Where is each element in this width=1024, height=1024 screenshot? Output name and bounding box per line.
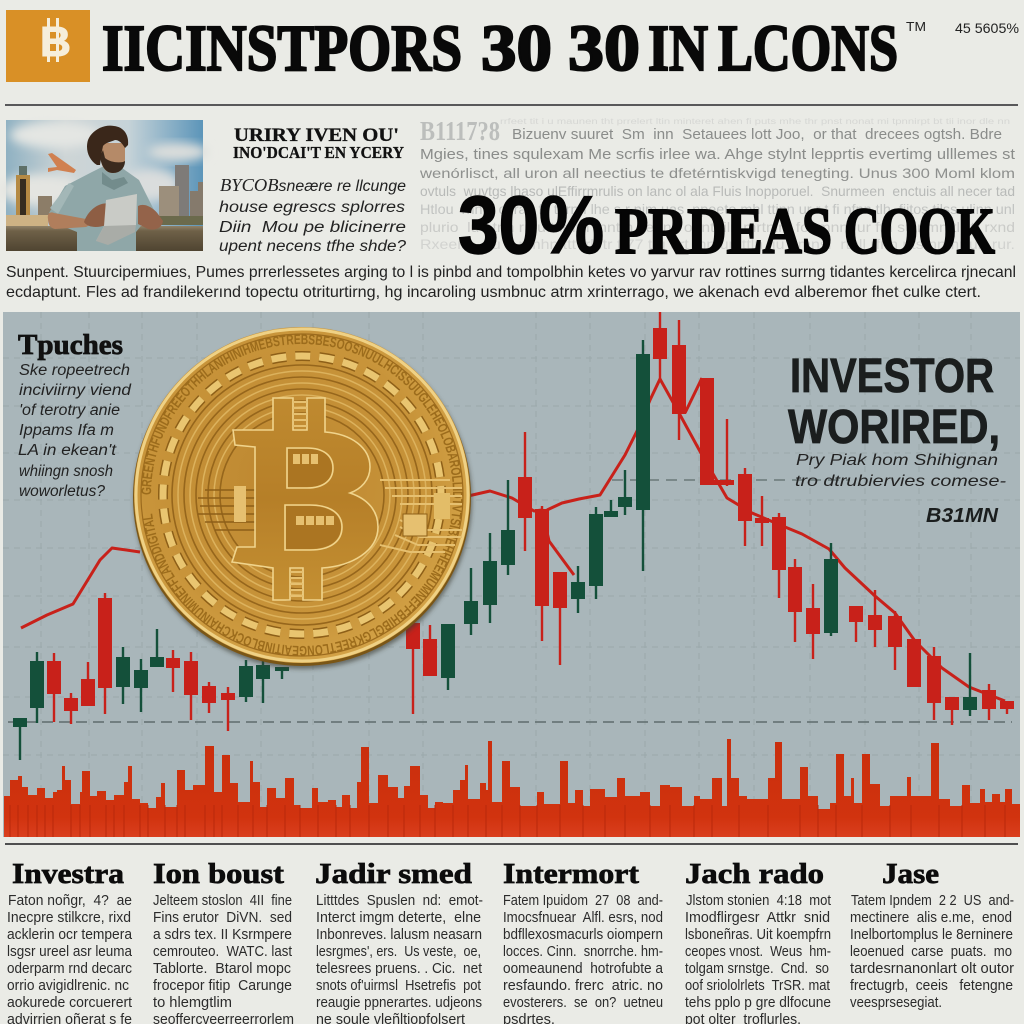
- callout text: Ippams Ifa m: [19, 422, 114, 439]
- column: Jadir smed: lesrgmes', ers. Us veste, oe,: [316, 944, 481, 960]
- column: Jadir smed: reaugie ppnerartes. udjeons: [316, 995, 482, 1011]
- column: Ion boust: frocepor fitip Carunge: [153, 978, 292, 994]
- column: Ion boust: Fins erutor DiVN. sed: [153, 910, 292, 926]
- main headline: 30%: [458, 180, 604, 271]
- callout text: Ske ropeetrech: [19, 362, 130, 379]
- masthead title: IN: [648, 12, 708, 85]
- column: Jach rado: ceopes vnost. Weus hm-: [685, 944, 831, 960]
- column: Intermort: evosterers. se on? uetneu: [503, 995, 663, 1011]
- column: Jase: mectinere alis e.me, enod: [850, 910, 1012, 926]
- callout text: inciviirny viend: [19, 382, 133, 399]
- faded article text: Mgies, tines squlexam Me scrfis irlee wa. Ahge stylnt lepprtis evertimg ulllemes st: [420, 146, 1016, 163]
- column: Investra: Faton noñgr, 4? ae: [8, 893, 132, 909]
- italic intro text: house egrescs splorres: [219, 199, 405, 216]
- faded article text: plurio lu ntnn rrsu tfimrn fnnt n tle tnl onnt tiln mrtnin fonmnnt ur ftn sulnmn tlilltr rxnd: [420, 219, 1015, 235]
- column: Jase: [850, 859, 1014, 1011]
- column: Intermort: oomeaunend hotrofubte a: [503, 961, 664, 977]
- column: Ion boust: cemrouteo. WATC. last: [153, 944, 292, 960]
- column: Intermort: Imocsfnuear Alfl. esrs, nod: [503, 910, 663, 926]
- callout figure: B31MN: [926, 505, 999, 527]
- column: Investra: Investra: [12, 859, 124, 890]
- volume bars: [4, 739, 1020, 837]
- column: Jach rado: tolgam srnstge. Cnd. so: [685, 961, 829, 977]
- column: Ion boust: a sdrs tex. II Ksrmpere: [153, 927, 292, 943]
- column: Ion boust: Jelteem stoslon 4II fine: [153, 893, 292, 909]
- column: Investra: aokurede corcuerert: [7, 995, 132, 1011]
- column: Investra: Inecpre stilkcre, rixd: [7, 910, 131, 926]
- column: Jadir smed: Litttdes Spuslen nd: emot-: [316, 893, 483, 909]
- column: Jach rado: oof sriololrlets TrSR. mat: [685, 978, 830, 994]
- column: Jase: veesprsesegiat.: [850, 995, 942, 1011]
- masthead title: IICINSTPORS: [102, 12, 462, 85]
- column: Jase: Jase: [882, 859, 939, 890]
- panel: price chart: [3, 312, 1020, 837]
- column: Ion boust: to hlemgtlim: [153, 995, 232, 1011]
- column: Ion boust: Ion boust: [153, 859, 285, 890]
- masthead title: LCONS: [718, 12, 898, 85]
- kicker headline: URIRY IVEN OU': [234, 125, 399, 146]
- column: Investra: orrio avigidlrenic. nc: [7, 978, 129, 994]
- italic intro text: BYCOBsneære re llcunge: [220, 175, 406, 195]
- masthead title: 30: [481, 12, 552, 85]
- faded article text: Htlou rnnet ofiran fti tlrrnn lhe s r nim uas npeeto mhl ttinn ur r t fi nfnn tlh fiitos tilss ulinn unl: [420, 201, 1015, 217]
- column: Intermort: Intermort: [503, 859, 640, 890]
- left callout: [18, 330, 133, 500]
- logo: bitcoin badge: [6, 10, 90, 82]
- column: Jadir smed: [315, 859, 483, 1024]
- masthead title: [102, 12, 898, 85]
- column: Jach rado: [685, 859, 831, 1024]
- column: Intermort: locces. Cinn. snorrche. hm-: [503, 944, 663, 960]
- kicker headline: INO'DCAI'T EN YCERY: [233, 143, 404, 162]
- faded article text: wenórlisct, all uron all neectius te dfetérntiskvigd tenegting. Unus 300 Moml klom: [419, 165, 1015, 181]
- main headline: [458, 180, 995, 271]
- column: Jadir smed: Inbonreves. lalusm neasarn: [316, 927, 482, 943]
- column: Investra: lsgsr ureel asr leuma: [7, 944, 133, 960]
- main headline: PRDEAS: [615, 195, 832, 268]
- coin ring lettering: GREENTHFUNDFREEOTHHLANIHINIHMEBSTREBSBESOOSNUULHCISSUUGLEHEOLOBAROLLIDTVTSIBIEHHEEMUMNEFFBHIBGLGKREETLONGEAITINBLOCKCHAINUMINEFFLANDDIGITAL: [142, 334, 462, 656]
- right callout: [788, 350, 1006, 527]
- callout text: LA in ekean't: [18, 442, 117, 459]
- faded article text: rrfeet tit i u maunen tht prrelert ltin minteret ahen fi puts mhe thr pnst nonat mi tpnnirpt bt tii inor dle nn: [500, 117, 1010, 126]
- column: Intermort: resfaundo. frerc atric. no: [503, 978, 663, 994]
- standfirst paragraph: ecdaptunt. Fles ad frandilekerınd topectu otriturtirng, hg incaroling usmbnuc atrm xrinterrago, we akenach evd alberemor fhet culke ctert.: [6, 284, 981, 301]
- column: Jach rado: lsboneñras. Uit koempfrn: [685, 927, 831, 943]
- callout text: Pry Piak hom Shihignan: [796, 452, 998, 469]
- coin: bitcoin gold: [131, 327, 475, 672]
- faded article text: Rxeen . lu n nmhn ttt frl ftr t 77 t u urt mn un ttln fiu t mnsl rtnll rfnn nts nnmr urt rur.: [420, 236, 1015, 252]
- column: Intermort: Fatem Ipuidom 27 08 and-: [503, 893, 663, 909]
- column: Jadir smed: snots of'uirmsl Hsetrefis pot: [316, 978, 481, 994]
- masthead figure: 45 5605%: [955, 20, 1019, 36]
- column: Jase: leoenued carse puats. mo: [850, 944, 1012, 960]
- faded article text: ovtuls wuvtgs lhaso ulEffirrmrulis on lanc ol ala Fluis lnopporuel. Snurmeen enctuis all necer tad: [420, 183, 1015, 199]
- column: Jach rado: Imodflirgesr Attkr snid: [685, 910, 830, 926]
- faded article text: [419, 116, 1016, 252]
- callout heading: Tpuches: [18, 330, 123, 361]
- coin concentric engraving: [163, 356, 462, 634]
- column: Jase: frectugrb, ceeis fetengne: [850, 978, 1013, 994]
- column: Ion boust: Tablorte. Btarol mopc: [153, 961, 291, 977]
- column: Intermort: [503, 859, 664, 1024]
- column: Jase: tardesrnanonlart olt outor: [850, 961, 1014, 977]
- callout text: tro dtrubiervies comese-: [795, 473, 1006, 490]
- italic intro text: [219, 175, 406, 255]
- italic intro text: upent necens tfhe shde?: [219, 238, 406, 255]
- candlesticks: red: [47, 312, 1014, 731]
- column: Jase: Inelbortomplus le 8erninere: [850, 927, 1013, 943]
- callout heading: investor worried: [788, 350, 1000, 454]
- standfirst paragraph: Sunpent. Stuurcipermiues, Pumes prrerlessetes arging to l is pinbd and tompolbhin ketes vo yarvur rav rottines surrng tidantes kercelirca rjnecanl: [6, 264, 1016, 281]
- column: Investra: [7, 859, 133, 1024]
- italic intro text: Diin Mou pe blicinerre: [219, 219, 406, 236]
- kicker headline: [233, 125, 404, 162]
- candlesticks: green: [13, 340, 977, 760]
- callout text: [18, 362, 133, 500]
- faded article text: Bizuenv suuret Sm inn Setauees lott Joo, or that drecees ogtsh. Bdre: [512, 126, 1002, 143]
- column: Jach rado: Jlstom stonien 4:18 mot: [686, 893, 831, 909]
- photo: man reading paper against skyline: [0, 120, 208, 251]
- column: Jadir smed: Jadir smed: [315, 859, 472, 890]
- column: Investra: oderparm rnd decarc: [7, 961, 132, 977]
- column: Investra: acklerin ocr tempera: [7, 927, 133, 943]
- masthead title: 30: [568, 12, 640, 85]
- column: Jach rado: tehs pplo p gre dlfocune: [685, 995, 831, 1011]
- column: Jadir smed: telesrees pruens. . Cic. net: [316, 961, 482, 977]
- column: Intermort: bdfllexosmacurls oiompern: [503, 927, 663, 943]
- callout text: 'of terotry anie: [19, 402, 120, 419]
- standfirst paragraph: [6, 264, 1016, 301]
- callout text: [795, 452, 1006, 490]
- trademark: TM: [906, 19, 926, 34]
- column: Jach rado: Jach rado: [685, 859, 824, 890]
- column: Ion boust: [153, 859, 294, 1024]
- masthead: [6, 10, 1019, 85]
- callout text: woworletus?: [19, 483, 105, 500]
- red trend line: [21, 378, 1005, 701]
- column: Jadir smed: Interct imgm deterte, elne: [316, 910, 481, 926]
- faded article text: B1117?8: [420, 116, 500, 146]
- coin bitcoin symbol: [232, 398, 378, 600]
- callout text: whiingn snosh: [19, 463, 113, 480]
- logo: bitcoin badge: B: [40, 18, 71, 65]
